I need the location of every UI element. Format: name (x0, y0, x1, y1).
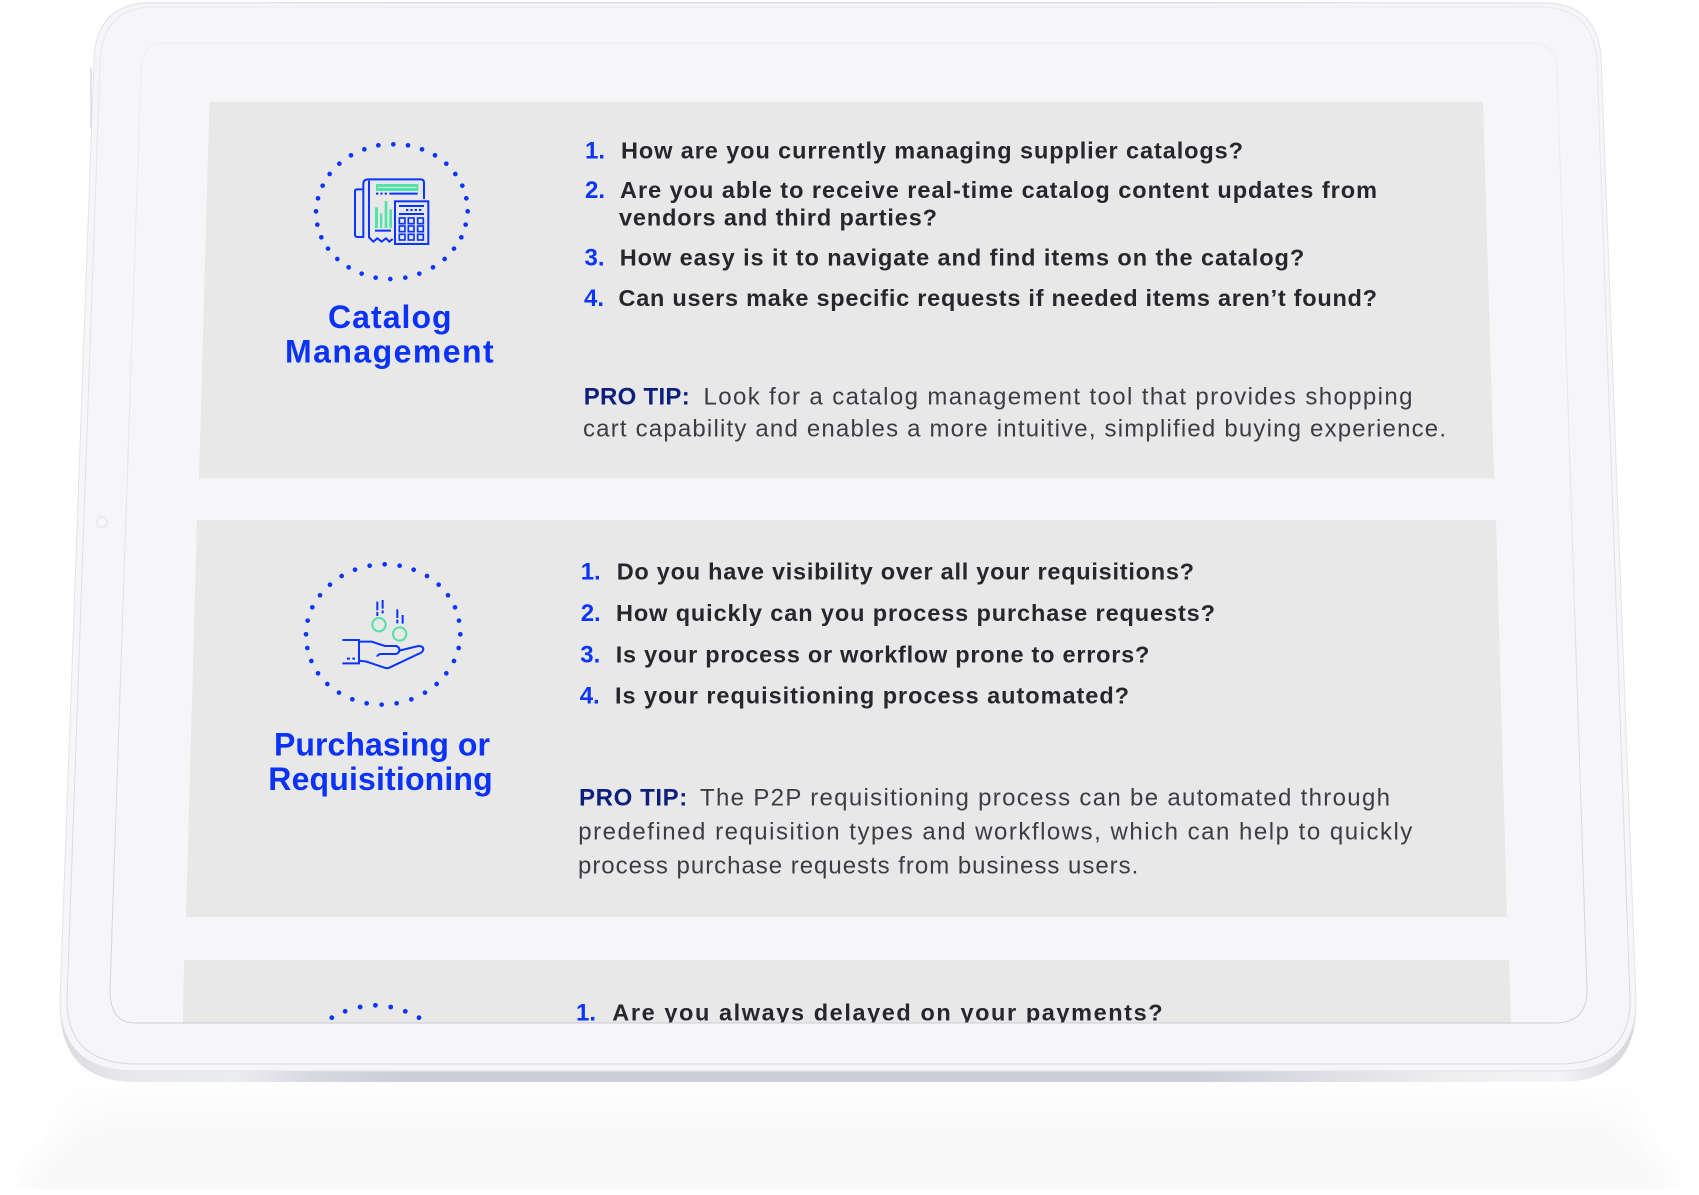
heading: purchasing or requisitioning: Requisitioning (268, 761, 493, 797)
heading: catalog management: Management (285, 334, 494, 370)
question list: purchasing or requisitioning: Is your process or workflow prone to errors? (616, 641, 1149, 667)
heading: purchasing or requisitioning: Purchasing or (274, 727, 490, 763)
pro tip: catalog management (583, 383, 1446, 443)
question list: purchasing or requisitioning (580, 558, 1215, 710)
question list: purchasing or requisitioning: Is your requisitioning process automated? (615, 683, 1129, 709)
pro tip: purchasing or requisitioning: PRO TIP: (579, 785, 687, 812)
question list: catalog management: 4. (584, 285, 604, 312)
pro tip: catalog management: cart capability and enables a more intuitive, simplified buying experience. (583, 416, 1446, 443)
question list: catalog management: vendors and third parties? (619, 205, 937, 231)
question list: purchasing or requisitioning: Do you have visibility over all your requisitions? (617, 558, 1194, 584)
panel: catalog management (199, 102, 1494, 478)
icon: catalog and calculator in dotted circle (314, 142, 470, 281)
question list: purchasing or requisitioning: 1. (581, 558, 601, 585)
question: payments: Are you always delayed on your payments? (612, 1000, 1163, 1026)
question list: catalog management: How are you currently managing supplier catalogs? (621, 137, 1243, 163)
icon: hand with coins in dotted circle (304, 562, 463, 707)
question list: catalog management: How easy is it to navigate and find items on the catalog? (620, 245, 1304, 271)
heading: catalog management (285, 299, 494, 370)
tablet screen (110, 43, 1587, 1023)
question list: catalog management: 2. (585, 177, 605, 204)
pro tip: purchasing or requisitioning: The P2P requisitioning process can be automated through (700, 785, 1390, 812)
heading: purchasing or requisitioning (268, 727, 493, 797)
icon: partial dotted circle (329, 1003, 421, 1020)
question list: purchasing or requisitioning: 3. (580, 641, 600, 668)
question: payments (578, 1004, 1162, 1022)
pro tip: purchasing or requisitioning: predefined requisition types and workflows, which can help to quickly (578, 818, 1412, 845)
device shadow (0, 1090, 1699, 1195)
question list: catalog management: Are you able to receive real-time catalog content updates from (620, 177, 1377, 203)
pro tip: catalog management: Look for a catalog management tool that provides shopping (704, 383, 1412, 410)
question list: catalog management: 3. (584, 245, 605, 272)
heading: catalog management: Catalog (328, 299, 452, 335)
panel: purchasing or requisitioning (186, 520, 1507, 917)
question list: purchasing or requisitioning: 4. (580, 683, 600, 710)
question list: catalog management: 1. (585, 137, 605, 164)
question: payments: 1. (576, 1000, 596, 1027)
question list: purchasing or requisitioning: 2. (581, 600, 601, 627)
question list: catalog management: Can users make specific requests if needed items aren’t found? (618, 285, 1377, 311)
pro tip: purchasing or requisitioning: process purchase requests from business users. (578, 852, 1138, 879)
panel: cropped third section (183, 960, 1511, 1027)
question list: purchasing or requisitioning: How quickly can you process purchase requests? (616, 600, 1215, 626)
pro tip: purchasing or requisitioning (578, 785, 1412, 879)
pro tip: catalog management: PRO TIP: (584, 383, 690, 410)
question list: catalog management (584, 137, 1377, 312)
